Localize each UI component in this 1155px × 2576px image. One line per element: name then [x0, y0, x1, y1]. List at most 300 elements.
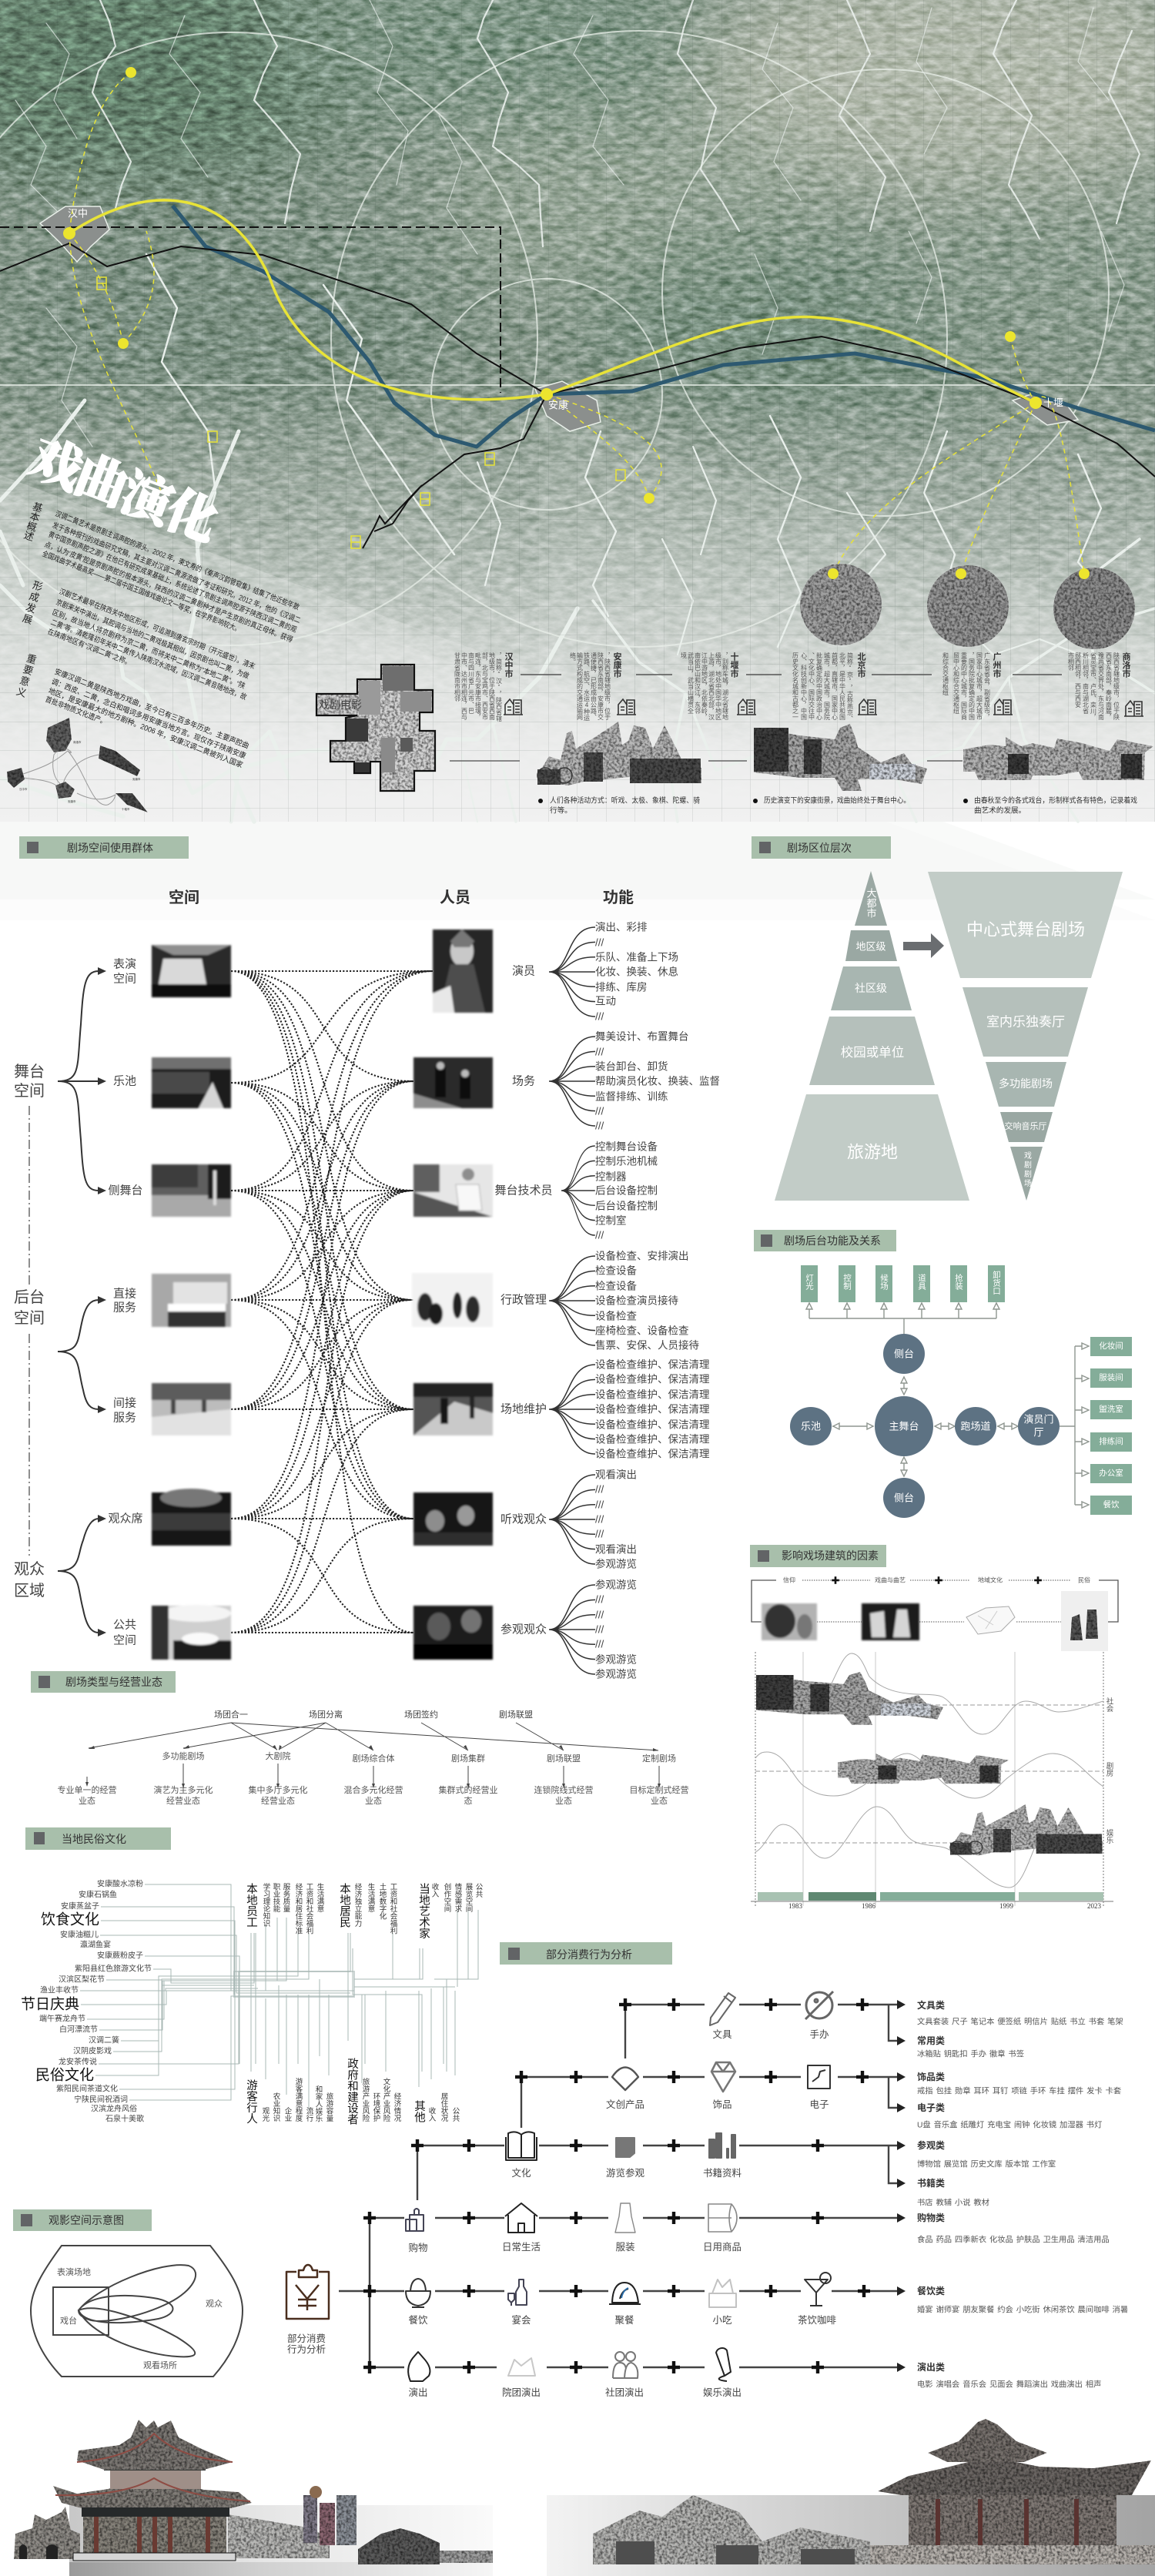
zone labels: 舞台: [14, 1063, 45, 1080]
city: 商洛市: 陕西省辖地级市，位于陕: [1113, 652, 1120, 721]
stakeholder columns bottom: 企业: [283, 2106, 292, 2122]
function list: 场务: 装台卸台、卸货: [595, 1060, 668, 1072]
timeline chart: 1999: [999, 1902, 1013, 1910]
stakeholder columns top: 当地艺术家: [417, 1883, 430, 1939]
pyramid: location levels: 社区级: [855, 982, 887, 994]
text block: 重要意义: 调：西皮、二黄，念白和唱词多用安康当地方言。现仅存于陕南安康: [50, 677, 247, 761]
space labels: 空间: [113, 1634, 136, 1646]
header: 部分消费行为分析: 部分消费行为分析: [546, 1948, 632, 1961]
stage relationship nodes: 主舞台: [889, 1420, 919, 1432]
consumption labels: 聚餐: [614, 2314, 634, 2326]
consumption categories: 饰品类: [917, 2071, 945, 2082]
text block: 基本概述: 全国戏曲学术最高奖——第二届中国王国维戏曲论文一等奖，在学界影响较大。: [41, 549, 243, 635]
function list: 参观观众: ///: [595, 1610, 604, 1620]
city: 十堰市: [681, 652, 782, 721]
icon: chip: [808, 2065, 830, 2089]
stage relationship nodes: 演员门: [1023, 1414, 1054, 1425]
photo: 场务: [413, 1057, 493, 1108]
city: 商洛市: 商洛市: [1121, 652, 1130, 678]
branch arrows from zones to spaces: [58, 967, 106, 1636]
building: large pavilion right: [870, 2419, 1155, 2564]
newspaper collage: 戏剧电影: [319, 698, 362, 711]
city: 十堰市: 境: [681, 652, 687, 659]
icon: books: [709, 2133, 735, 2158]
text block: 形成发展: 区别，故当地人将京剧称为京二黄，而将关中二黄称为“本地二黄”。“陕: [51, 608, 247, 691]
influence factors row: 信仰: [783, 1576, 795, 1583]
space labels: 观众席: [108, 1512, 143, 1525]
folk culture left list: 安康蕨粉皮子: [97, 1950, 143, 1961]
city: 北京市: 北京市: [856, 652, 865, 678]
folk culture left list: 汉滨龙舟风俗: [91, 2104, 137, 2113]
viewing space diagram: 观看场所: [143, 2360, 177, 2370]
icon: open book: [506, 2132, 537, 2160]
consumption labels: 手办: [809, 2028, 829, 2040]
photo: 听戏观众: [413, 1492, 493, 1546]
stakeholder columns top: 工资和社会福利: [305, 1883, 313, 1935]
icon: shopping bag: [406, 2209, 424, 2231]
consumption labels: 行为分析: [287, 2344, 326, 2355]
city: 安康市: 铁路、航空、水运4种运: [584, 652, 590, 722]
city: 汉中市: 毗连，东与安康市接壤，: [474, 652, 482, 720]
stakeholder columns bottom: 收入: [427, 2106, 436, 2122]
backstage room boxes: 餐饮: [1103, 1499, 1120, 1509]
folk culture left list: [21, 1879, 152, 2124]
function list: 听戏观众: 观看演出: [595, 1469, 637, 1480]
zone labels: [14, 1063, 45, 1600]
theatre operation tree: 混合多元化经营: [343, 1784, 403, 1795]
function list: 场务: 舞美设计、布置舞台: [595, 1030, 688, 1043]
function list: 演员: 互动: [595, 995, 616, 1007]
timeline chart: [751, 1652, 1113, 1910]
city: 北京市: 历史文化名城和古都之一: [792, 652, 799, 720]
theatre operation tree: 演艺为主多元化: [154, 1784, 213, 1795]
small region maps: 安康市: [132, 777, 141, 781]
folk culture left list: 紫阳县红色旅游文化节: [75, 1964, 152, 1973]
city: 安康市: 安康市: [612, 652, 622, 678]
stakeholder columns bottom: 游客满意程度: [294, 2077, 303, 2122]
consumption categories: 冰箱贴 钥匙扣 手办 徽章 书签: [917, 2048, 1024, 2059]
consumption categories: 食品 药品 四季新衣 化妆品 护肤品 卫生用品 清洁用品: [917, 2235, 1110, 2244]
theatre operation tree: 集中多厅多元化: [248, 1784, 308, 1795]
city: 商洛市: 西省东南部，秦岭南麓，: [1106, 652, 1112, 720]
icon: cloche: [609, 2283, 641, 2304]
city: 安康市: 陕西省东南部，安康市交: [598, 652, 604, 721]
inverted pyramid: theatre types: 室内乐独奏厅: [986, 1015, 1065, 1029]
consumption labels: 服装: [615, 2242, 635, 2253]
city: 广州市: [942, 652, 1062, 721]
function list: 舞台技术员: [595, 1140, 658, 1241]
wave: society: [832, 1653, 1103, 1734]
photo: 信仰: [762, 1603, 817, 1640]
grid overlay: [0, 0, 1155, 822]
text block: 重要意义: 安康汉调二黄是陕西地方戏曲，至今已有三百多年历史。主要声腔曲: [53, 667, 250, 751]
stakeholder columns bottom: 农业知识: [271, 2092, 280, 2122]
icon: sightseeing: [616, 2138, 634, 2157]
stakeholder columns bottom: 文化产业风险: [382, 2077, 390, 2122]
icon: budget clipboard: [286, 2265, 329, 2319]
folk culture connector lines: [80, 1884, 478, 2110]
consumption labels: 院团演出: [502, 2387, 541, 2398]
function list: 场地维护: [595, 1358, 710, 1460]
theatre operation tree: 业态: [79, 1796, 95, 1806]
viewing space diagram: 表演场地: [57, 2266, 91, 2277]
photo: 场地维护: [413, 1383, 493, 1435]
function list: 行政管理: 检查设备: [595, 1265, 637, 1277]
backstage function boxes: 候场: [879, 1273, 889, 1291]
function list: 演员: [595, 921, 678, 1023]
theatre operation tree: 剧场联盟: [547, 1753, 581, 1764]
column titles: 人员: [440, 889, 470, 906]
collage: people activities: [537, 722, 701, 786]
stakeholder columns bottom: 经济情况: [393, 2092, 401, 2122]
photo: 侧舞台: [152, 1164, 231, 1217]
inverted pyramid: theatre types: [928, 872, 1123, 1201]
city: 商洛市: 市相邻: [1067, 652, 1075, 672]
timeline chart: 1986: [862, 1902, 876, 1910]
people labels: 参观观众: [500, 1623, 547, 1636]
city: 十堰市: 十堰市: [729, 652, 739, 678]
icon: house: [505, 2203, 537, 2233]
map circles and axis lines: [0, 31, 1155, 647]
function list: 参观观众: 参观游览: [595, 1653, 637, 1665]
pyramid: location levels: [775, 871, 969, 1201]
caption: people: [538, 796, 700, 815]
function list: 舞台技术员: 后台设备控制: [595, 1184, 658, 1197]
dashed frame line: [0, 227, 500, 393]
folk culture left list: 节日庆典: [21, 1996, 79, 2013]
icon: fan: [612, 2067, 638, 2090]
function list: 场务: ///: [595, 1120, 604, 1132]
theatre operation tree: 定制剧场: [642, 1753, 676, 1764]
consumption categories: 文具套装 尺子 笔记本 便签纸 明信片 贴纸 书立 书套 笔架: [917, 2016, 1123, 2027]
city: 十堰市: 南依巴山和汉江，东邻: [695, 652, 701, 715]
zone labels: 区域: [14, 1582, 45, 1600]
icon: snack: [709, 2280, 736, 2307]
caption: people: 行等。: [550, 806, 572, 815]
city: 安康市: [570, 652, 672, 722]
icon: opera house: [508, 2358, 535, 2376]
consumption labels: [287, 2028, 836, 2398]
small region maps: [7, 718, 148, 812]
influence factors row: 民俗: [1078, 1576, 1090, 1583]
text block: 基本概述: 点，认为‘皮黄’腔是京剧声腔的根本源头，陕西的汉调二黄剧种才是产生京剧的真正母体。获得: [43, 540, 294, 645]
header: 剧场空间使用群体: 剧场空间使用群体: [67, 842, 153, 854]
text block: 形成发展: 二黄”等。清乾隆初年关中二黄传入陕南汉水流域，因汉调二黄音随地改，故: [49, 618, 248, 702]
consumption categories: 文具类: [917, 1999, 945, 2011]
dotted links between spaces and people: [231, 971, 433, 1633]
photos: spaces: [152, 945, 231, 1660]
consumption labels: 娱乐演出: [703, 2387, 742, 2398]
folk culture left list: 汉调二簧: [89, 2035, 119, 2045]
city: 商洛市: 郧西相邻，西与西安: [1075, 652, 1081, 708]
stakeholder columns bottom: 游客行人: [245, 2079, 257, 2124]
header: 剧场后台功能及关系: [754, 1230, 896, 1251]
pyramid: location levels: 地区级: [855, 941, 886, 952]
people labels: 场务: [512, 1075, 535, 1087]
function list: 行政管理: 座椅检查、设备检查: [595, 1325, 689, 1337]
influence factors row: 戏曲与曲艺: [875, 1576, 906, 1583]
city: 北京市: 简称“京”，古称燕京、: [847, 652, 853, 722]
consumption icons: [286, 1991, 833, 2381]
stakeholder columns bottom: 政府和建设者: [346, 2058, 358, 2125]
white river and road network: [0, 0, 1155, 822]
theatre operation tree: 剧场集群: [451, 1753, 485, 1764]
consumption labels: 日用商品: [703, 2241, 742, 2253]
photo: 舞台技术员: [413, 1164, 493, 1217]
backstage function boxes: 控制: [842, 1273, 852, 1290]
function list: 场地维护: 设备检查维护、保洁清理: [595, 1372, 710, 1385]
backstage function boxes: 灯光: [805, 1274, 814, 1291]
consumption categories: 电子类: [917, 2102, 945, 2113]
icon: two people: [613, 2352, 638, 2378]
function list: 参观观众: ///: [595, 1623, 604, 1636]
function list: 行政管理: [595, 1249, 699, 1351]
stakeholder columns top: 收入: [430, 1882, 439, 1898]
theatre operation tree: 大剧院: [265, 1750, 291, 1761]
map background with terrain: [0, 0, 1155, 920]
photo: 表演空间: [152, 945, 231, 997]
function list: 听戏观众: ///: [595, 1514, 604, 1525]
pyramid: location levels: 大都市: [865, 888, 876, 918]
theatre operation tree: 业态: [365, 1796, 382, 1806]
photo: 直接服务: [152, 1274, 231, 1327]
stakeholder columns top: 职业技能: [271, 1883, 280, 1913]
people labels: 场地维护: [500, 1403, 547, 1415]
folk culture left list: 石泉十美歌: [105, 2113, 144, 2124]
folk culture left list: 安康酸水凉粉: [97, 1879, 143, 1888]
text block: 重要意义: 地区，是安康最大的地方剧种。2006 年，安康汉调二黄被列入国家: [47, 686, 244, 770]
function list: 听戏观众: ///: [595, 1483, 604, 1496]
small region maps: 商洛市: [73, 740, 82, 744]
function list: 听戏观众: ///: [595, 1499, 604, 1511]
city: 汉中市: [454, 652, 561, 722]
function list: 场地维护: 设备检查维护、保洁清理: [595, 1388, 710, 1400]
theatre operation tree: 专业单一的经营: [57, 1784, 117, 1795]
photo: 民俗: [1061, 1591, 1108, 1651]
city: 商洛市: 豫两省交界处，东与河南: [1098, 652, 1104, 720]
function list: 场地维护: 设备检查维护、保洁清理: [595, 1432, 710, 1445]
consumption labels: 演出: [408, 2387, 428, 2398]
city: 商洛市: 析川相邻，南与湖北省: [1083, 652, 1089, 715]
space labels: 公共: [113, 1619, 136, 1631]
photo: 行政管理: [412, 1273, 493, 1327]
folk culture left list: 民俗文化: [35, 2067, 94, 2084]
backstage room boxes: [1090, 1337, 1132, 1515]
city labels on map: 汉中: [68, 208, 88, 219]
city: 十堰市: 上游，湖北省西北部，汉: [708, 652, 715, 721]
section heading: 基本概述: 基本概述: [21, 501, 44, 542]
photo: 观众席: [152, 1489, 231, 1546]
consumption labels: 茶饮咖啡: [798, 2314, 836, 2326]
function list: 听戏观众: ///: [595, 1528, 604, 1540]
text block: 形成发展: 在陕南地区有“汉调二黄”之称。: [46, 627, 133, 668]
folk culture left list: 汉滨区梨花节: [59, 1975, 105, 1984]
icon: wine bottle: [508, 2280, 527, 2306]
wave: theatre: [755, 1752, 1103, 1798]
function list: 行政管理: 设备检查演员接待: [595, 1294, 678, 1306]
folk culture left list: 端午赛龙舟节: [39, 2013, 85, 2024]
space labels: 服务: [113, 1411, 136, 1425]
header: 剧场空间使用群体: [19, 836, 189, 859]
space labels: [108, 958, 143, 1646]
function list: 舞台技术员: 控制器: [595, 1171, 627, 1183]
theatre operation tree: 经营业态: [261, 1795, 295, 1806]
space labels: 直接: [113, 1288, 136, 1300]
viewing space diagram: 观众: [206, 2299, 223, 2309]
space labels: 空间: [113, 972, 136, 986]
stakeholder columns top: [245, 1882, 483, 1939]
theatre operation tree: 业态: [555, 1796, 572, 1806]
city: 广州市: 贸中心和综合交通枢纽: [953, 652, 959, 714]
text block: 基本概述: 汉调二黄艺术是京剧主调声腔的源头。2002 年，束文寿的《秦声汉韵管窥集》结集了他近些年散: [54, 509, 301, 612]
consumption categories: 参观类: [917, 2139, 945, 2151]
city: 广州市: 国家中心城市，超大城市: [976, 652, 983, 721]
consumption labels: 日常生活: [502, 2242, 541, 2253]
zone divider lines: [28, 1106, 30, 1556]
icon: opera mask: [408, 2352, 430, 2381]
stakeholder columns bottom: 环境保护: [371, 2092, 380, 2122]
function list: 听戏观众: 观看演出: [595, 1543, 637, 1556]
icon: cocktail: [805, 2280, 828, 2306]
backstage function boxes: 卸货口: [992, 1270, 1001, 1295]
function list: 舞台技术员: 控制室: [595, 1214, 627, 1226]
stakeholder columns top: 经济独立能力: [353, 1882, 362, 1928]
timeline chart: 1983: [788, 1902, 802, 1910]
folk culture left list: 瀛湖鱼宴: [80, 1939, 111, 1950]
function list: 听戏观众: [595, 1469, 637, 1569]
stakeholder columns top: 生活满意: [316, 1882, 324, 1912]
black railway lines: [0, 243, 1155, 548]
function list: 演员: 演出、彩排: [595, 921, 647, 933]
caption: people: 人们各种活动方式：听戏、太极、象棋、陀螺、骑: [550, 796, 700, 806]
building: small left gate: [14, 2507, 80, 2559]
function list: 舞台技术员: 后台设备控制: [595, 1200, 658, 1212]
caption: stages: 由春秋至今的各式戏台，形制样式各有特色，记录着戏: [974, 796, 1137, 806]
city: 广州市: 重要的中心城市，国际商: [961, 652, 967, 721]
lakes and city blobs: [40, 206, 1078, 431]
function list: 行政管理: 设备检查、安排演出: [595, 1249, 688, 1261]
backstage function boxes: 道具: [917, 1273, 926, 1291]
stakeholder columns top: 创作空间: [442, 1882, 451, 1913]
function list: 听戏观众: 参观游览: [595, 1557, 637, 1569]
photo: 戏曲与曲艺: [862, 1603, 919, 1640]
consumption tree lines: [339, 1998, 906, 2373]
caption: street: 历史演变下的安康街景，戏曲始终处于舞台中心。: [764, 796, 910, 806]
stakeholder columns top: 土地数字化: [377, 1882, 387, 1920]
people labels: [494, 964, 553, 1636]
icon: cloche highlight: [621, 2288, 628, 2298]
folk culture left list: 安康石锅鱼: [79, 1890, 117, 1899]
space labels: 间接: [113, 1397, 136, 1409]
aerial circle images: [800, 564, 1135, 649]
header: 剧场类型与经营业态: [31, 1671, 176, 1693]
consumption labels: 文化: [511, 2167, 531, 2179]
section heading: 形成发展: 形成发展: [19, 579, 44, 627]
city: 北京市: 心、科技创新中心，中国: [801, 652, 807, 721]
photo: 演员: [433, 930, 493, 1013]
zone labels: 空间: [14, 1082, 45, 1100]
influence factors row: 地域文化: [978, 1576, 1003, 1583]
stakeholder columns bottom: 其他: [413, 2100, 425, 2123]
header: 影响戏场建筑的因素: [750, 1545, 886, 1567]
folk culture left list: 龙安茶传说: [59, 2056, 97, 2067]
yellow routes: [69, 72, 1084, 574]
text block: 基本概述: 发于各种报刊的戏曲研究文稿，其主要对汉调二黄源流做了考证和研究。2012 年，他的《汉调二: [51, 521, 302, 625]
building: main pavilion left: [53, 2420, 252, 2561]
consumption categories: 书店 教辅 小说 教材: [917, 2198, 989, 2207]
consumption labels: 饰品: [712, 2099, 732, 2110]
city: 汉中市: 部，北与宝鸡市、西安市: [482, 652, 488, 721]
city: 汉中市: ，简称“汉”，陕西省辖: [496, 652, 502, 722]
icon: pencil: [710, 1993, 735, 2025]
consumption labels: 购物: [408, 2242, 428, 2253]
city: 十堰市: 级市，地处中国华中地区: [715, 652, 722, 720]
theatre operation tree: 态: [464, 1796, 473, 1806]
collage: stage pavilions: [963, 737, 1153, 780]
stage relationship nodes: 跑场道: [960, 1420, 991, 1432]
zone labels: 后台: [14, 1288, 45, 1306]
city: 汉中市: 甘肃省陇南市相邻: [454, 652, 460, 702]
header: 剧场区位层次: [752, 836, 891, 859]
header: 当地民俗文化: 当地民俗文化: [62, 1833, 126, 1845]
function list: 参观观众: [595, 1579, 637, 1680]
function list: 行政管理: 售票、安保、人员接待: [595, 1338, 699, 1351]
city: 北京市: [792, 652, 932, 722]
city: 北京市: 批复确定的中国政治中心: [816, 652, 822, 720]
backstage room boxes: 排练间: [1099, 1436, 1123, 1446]
consumption categories: 婚宴 谢师宴 朋友聚餐 约会 小吃街 休闲茶饮 晨间咖啡 消暑: [917, 2304, 1128, 2315]
stakeholder columns bottom: 公共: [451, 2107, 460, 2122]
stage relationship nodes: [790, 1334, 1060, 1518]
city: 安康市: ，陕西省辖地级市，位于: [604, 652, 611, 720]
city: 汉中市: 南与四川省广元市、巴: [468, 652, 474, 714]
theatre operation tree: 经营业态: [166, 1795, 200, 1806]
timeline chart: 社会: [1104, 1697, 1113, 1713]
theatre operation tree: 剧场综合体: [353, 1753, 394, 1764]
yellow station markers: [63, 67, 1042, 548]
backstage function boxes: [801, 1265, 1005, 1302]
city: 汉中市: 地级市，位于陕西省西南: [488, 652, 496, 720]
icon: microphone: [716, 2348, 731, 2381]
icon: diamond: [711, 2062, 735, 2092]
header: 剧场后台功能及关系: 剧场后台功能及关系: [784, 1234, 881, 1247]
inverted pyramid: theatre types: 戏剧剧场: [1023, 1151, 1032, 1188]
timeline chart: 娱乐: [1104, 1828, 1113, 1844]
inverted pyramid: theatre types: 中心式舞台剧场: [966, 920, 1085, 940]
icon: dress: [615, 2203, 635, 2233]
function list: 场务: 帮助演员化妆、换装、监督: [595, 1075, 720, 1087]
function list: 行政管理: 设备检查: [595, 1309, 637, 1321]
icon: toilet paper roll: [708, 2204, 737, 2232]
header: 观影空间示意图: [13, 2209, 152, 2231]
connector lines between collages: [450, 760, 962, 762]
city: 北京市: 北平，是中华人民共和国: [839, 652, 845, 721]
consumption labels: 小吃: [712, 2315, 732, 2326]
city: 十堰市: ，别称车城，湖北省辖地: [722, 652, 728, 720]
stakeholder columns bottom: 旅游容量: [325, 2092, 333, 2122]
consumption labels: 文具: [712, 2028, 732, 2040]
stakeholder columns top: 展览空间: [464, 1883, 473, 1913]
space labels: 服务: [113, 1301, 136, 1314]
timeline chart: 剧房: [1104, 1762, 1113, 1777]
title: 戏曲演化: [22, 430, 225, 552]
theatre operation tree: 剧场联盟: [499, 1709, 533, 1720]
city: 广州市: 广东省省会，副省级市，: [984, 652, 990, 720]
header: 部分消费行为分析: [500, 1942, 672, 1965]
theatre operation tree: 目标定制式经营: [630, 1784, 688, 1795]
stakeholder columns top: 服务质量: [282, 1883, 290, 1912]
folk culture left list: 饮食文化: [41, 1911, 99, 1928]
